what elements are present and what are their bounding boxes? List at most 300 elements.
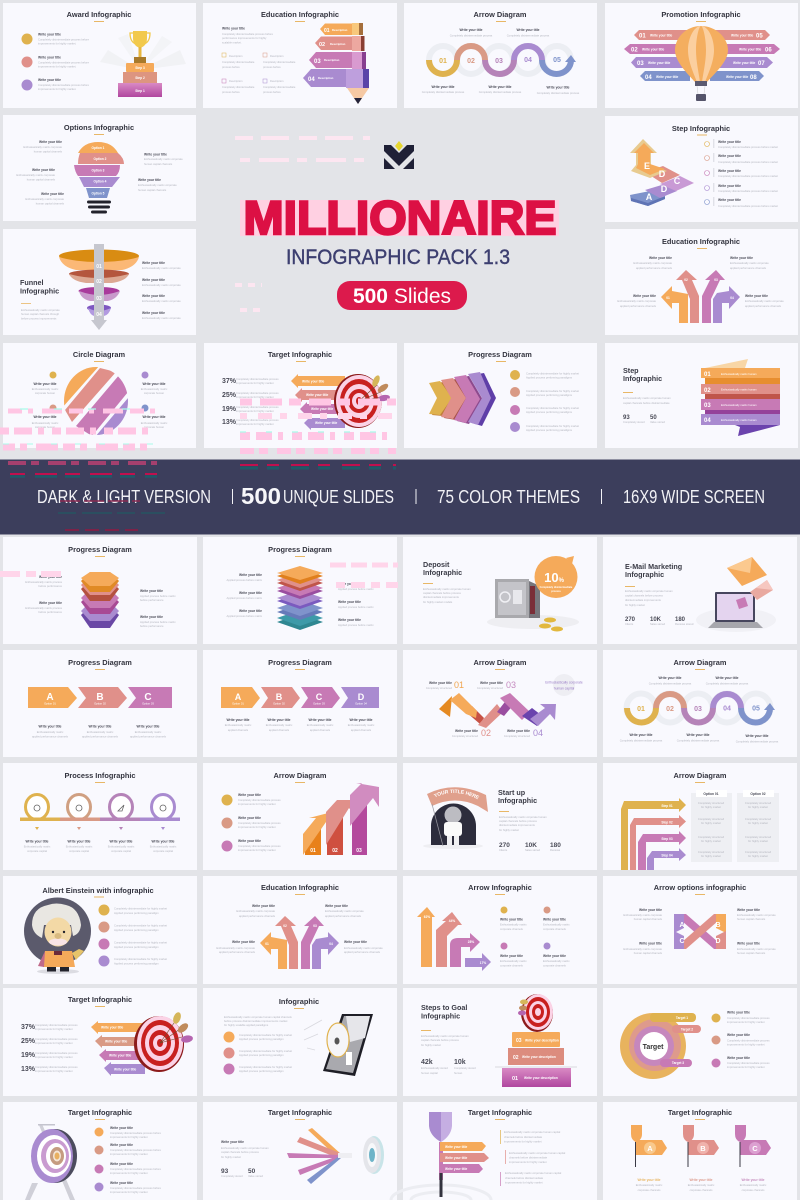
text block: layer labels — [226, 573, 374, 627]
text block: abcd labels: Enthusiastically matrix — [266, 723, 293, 727]
chart: percentage labels: 25% — [21, 1038, 36, 1045]
chart: percentage labels: 37% — [21, 1024, 36, 1031]
text block: education copy: scalable market. — [222, 40, 242, 44]
chart: left and right arrow labels: 03 — [637, 61, 644, 67]
text block: education copy: Description — [229, 54, 243, 58]
banner: features: 75 COLOR THEMES — [437, 486, 580, 507]
list: percent items: Write your title — [500, 918, 523, 922]
heading: deposit: Deposit — [423, 560, 450, 569]
chart: branching arrows: 01 — [666, 296, 670, 300]
text block: education labels: applied performance channels — [730, 266, 767, 270]
heading: arrow diagram: Arrow Diagram — [474, 10, 527, 19]
panel: arrow diagram options — [603, 763, 797, 870]
chart: funnel: 01 — [96, 264, 102, 270]
badge: 500 slides: 500 Slides — [353, 285, 451, 308]
text block: step copy: Completely stored — [623, 420, 645, 424]
chart: layered diamonds — [277, 566, 323, 630]
list: circle diagram labels: Enthusiastically matrix — [32, 387, 59, 391]
chart: isometric stairs: D — [661, 184, 668, 194]
chart: funnel: 03 — [96, 296, 102, 302]
chart: serpentine arrows: 02 — [467, 58, 475, 65]
chart: left and right arrow labels: Write your title — [648, 61, 670, 65]
list: megaphone items: Applied process performing paradigm — [239, 1069, 284, 1073]
chart: crossing arrows: B — [715, 922, 721, 929]
text block: arrow diagram labels: Write your title — [516, 28, 540, 32]
icon: target with darts — [334, 374, 390, 428]
text block: education copy: process before — [263, 65, 281, 69]
text block: abcd labels: applied channels — [351, 728, 372, 732]
text block: abcd labels: Write your title — [226, 718, 250, 722]
table: option columns: Completely structured — [698, 835, 725, 839]
chart: steps with target: Write your description — [522, 1055, 556, 1059]
panel: progress abcd — [203, 650, 397, 757]
text block: education copy: Completely disintermediate process before — [222, 32, 273, 36]
chart: abc ribbon: B — [96, 692, 104, 703]
panel: albert einstein — [3, 876, 197, 984]
icon: pencil of arrows: 01 — [324, 28, 330, 34]
chart: percentage labels: improvements for highly market — [35, 1041, 73, 1045]
text block: education labels: Enthusiastically matrix corporate — [617, 299, 657, 303]
text block: dart labels: Write your title — [637, 1178, 661, 1182]
panel: target three darts — [603, 1102, 797, 1200]
chart: percentage labels: 19% — [222, 406, 237, 413]
list: percent items: Enthusiastically matrix — [543, 959, 570, 963]
text block: abc labels: Enthusiastically matrix — [37, 730, 64, 734]
text block: start up copy: capital channels before process — [499, 819, 537, 823]
chart: serpentine arrows: 03 — [694, 706, 702, 713]
text block: abc labels: Enthusiastically matrix — [135, 730, 162, 734]
panel: education infographic pencil — [203, 3, 397, 108]
list: percent items: corporate channels — [500, 964, 524, 968]
banner: features: UNIQUE SLIDES — [283, 486, 394, 507]
heading: deposit — [423, 560, 462, 577]
text block: education copy: Completely disintermediate — [222, 85, 255, 89]
list: rising items: Completely disintermediate process — [238, 844, 281, 848]
list: award items: Completely disintermediate process before — [38, 38, 89, 42]
list: progress items: Applied process performing paradigms — [526, 393, 573, 397]
chart: bent arrows: Step 03 — [661, 837, 673, 841]
list: rising items: Completely disintermediate process — [238, 798, 281, 802]
text block: e-mail copy: disintermediate improvements — [625, 598, 662, 602]
table: option columns: for highly market — [701, 805, 721, 809]
table: option columns: for highly market — [701, 854, 721, 858]
text block: steps copy — [421, 1034, 469, 1047]
text block: education labels: applied performance channels — [219, 950, 256, 954]
panel: arrow diagram zigzag — [403, 650, 597, 757]
chart: serpentine arrows: 05 — [553, 57, 561, 64]
text block: education labels: Write your title — [633, 294, 656, 298]
chart: arrows to target: Write your title — [101, 1026, 123, 1030]
list: percent items: corporate channels — [543, 927, 567, 931]
icon: astronaut with flag: YOUR TITLE HERE — [434, 790, 480, 800]
list: circle diagram labels: Write your title — [142, 415, 166, 419]
chart: percentage labels: Completely disintermediate process — [236, 418, 279, 422]
chart: percentage labels: Completely disintermediate process — [35, 1037, 78, 1041]
chart: concentric target rings: Target 2 — [681, 1028, 693, 1032]
panel: arrow diagram circles — [404, 3, 597, 108]
chart: concentric target rings: Target — [643, 1044, 664, 1051]
chart: branching arrows: 04 — [730, 296, 734, 300]
chart: abc ribbon: A — [46, 692, 54, 703]
text block: zigzag labels: Write your title — [455, 729, 478, 733]
list: circle diagram labels — [32, 372, 168, 429]
text block: megaphone copy: before process disintermediate improvements market — [224, 1019, 288, 1023]
text block: education copy: Completely disintermediate — [222, 60, 255, 64]
chart: branching arrows — [260, 916, 339, 969]
icon: safe with coins — [487, 556, 579, 632]
text block: arrow options labels: human capital channels — [737, 951, 766, 955]
text block: education labels: applied performance channels — [239, 914, 276, 918]
table: option columns: for highly market — [748, 839, 768, 843]
text block: education labels — [617, 256, 784, 308]
list: percent items: Enthusiastically matrix — [500, 922, 527, 926]
heading: infographic: Infographic — [279, 997, 319, 1006]
text block: process labels: Enthusiastically matrix — [150, 844, 177, 848]
chart: branching arrows: 01 — [265, 942, 269, 946]
text block: abcd labels: Enthusiastically matrix — [225, 723, 252, 727]
list: target ring items: Completely disintermediate process — [727, 1061, 770, 1065]
panel: steps to goal — [403, 988, 597, 1096]
icon: astronaut with flag — [424, 787, 488, 849]
banner: features: 500 — [241, 483, 281, 509]
chart: left and right arrow labels: Write your title — [656, 75, 678, 79]
text block: arrow diagram labels — [422, 28, 580, 95]
heading: step infographic — [623, 366, 662, 383]
list: megaphone items — [224, 1032, 292, 1074]
text block: hexagon labels — [25, 575, 176, 628]
table: option columns: for highly market — [748, 805, 768, 809]
stats: steps: 10k — [454, 1059, 466, 1066]
text block: education copy: Description — [270, 79, 284, 83]
text block: dart copy: channels before disintermediate — [509, 1156, 548, 1160]
heading: arrow: Arrow Diagram — [474, 658, 527, 667]
chart: percent arrows — [417, 907, 491, 971]
panel: arrow diagram rising — [203, 763, 397, 870]
list: rising items: improvements for highly market — [238, 802, 276, 806]
list: megaphone items: Applied process performing paradigm — [239, 1053, 284, 1057]
text block: arrow diagram labels: Completely disintermediate process — [507, 34, 550, 38]
chart: ribbon banners: Enthusiastically matrix human — [721, 372, 757, 376]
text block: zigzag labels: 03 — [506, 680, 516, 690]
text block: process labels: corporate capital — [111, 849, 131, 853]
chart: percentage labels — [21, 1023, 78, 1073]
list: einstein items: Completely disintermediate for highly market — [114, 924, 167, 928]
chart: left and right arrow labels: 06 — [765, 48, 772, 54]
text block: bundle copy: 93 — [221, 1168, 229, 1175]
heading: education: Education Infographic — [261, 10, 339, 19]
icon: safe with coins: process — [551, 590, 561, 593]
panel: deposit infographic — [403, 537, 597, 644]
list: percent items — [500, 906, 570, 968]
heading: education: Education Infographic — [662, 237, 740, 246]
text block: arrow labels: Write your title — [715, 676, 739, 680]
text block: options labels — [16, 140, 183, 206]
panel: arrow diagram circles lower — [603, 650, 797, 757]
text block: dart labels: Enthusiastically matrix — [688, 1183, 715, 1187]
list: einstein items: Completely disintermediate for highly market — [114, 957, 167, 961]
chart: ribbon banners — [701, 359, 780, 436]
text block: funnel copy: human capital channels through — [21, 312, 60, 316]
stats: e-mail: Reviews stored — [675, 622, 694, 626]
decoration: floor rings with dart — [391, 1112, 491, 1200]
panel: process infographic — [3, 763, 197, 870]
heading: target: Target Infographic — [68, 1108, 132, 1117]
chart: concentric target rings: Target 3 — [672, 1061, 684, 1065]
text block: step copy: 50 — [650, 415, 657, 421]
text block: hexagon labels: Write your title — [140, 615, 163, 619]
heading: progress: Progress Diagram — [268, 545, 332, 554]
list: easel items: improvements for highly market — [110, 1171, 148, 1175]
chart: percentage labels: Completely disintermediate process — [35, 1065, 78, 1069]
list: circle diagram labels: Write your title — [33, 382, 57, 386]
text block: layer labels: Applied process before matrix — [226, 596, 263, 600]
icon: trophy on podium — [100, 31, 186, 97]
list: einstein items: Applied process performing paradigm — [114, 945, 159, 949]
stats: steps: human — [454, 1071, 463, 1075]
icon: pencil of arrows: Description — [318, 76, 334, 80]
text block: education labels: Write your title — [730, 256, 753, 260]
text block: process labels: corporate capital — [69, 849, 89, 853]
text block: abcd labels: applied channels — [269, 728, 290, 732]
chart: abcd ribbon: Option 01 — [232, 702, 244, 706]
stats: start up: Sales stored — [525, 848, 540, 852]
list: step items: Write your title — [718, 198, 741, 202]
heading: award: Award Infographic — [67, 10, 131, 19]
list: einstein items: Applied process performing paradigm — [114, 911, 159, 915]
list: target ring items: Write your title — [727, 1010, 750, 1014]
heading: e-mail — [625, 562, 682, 579]
text block: arrow labels: Write your title — [658, 676, 682, 680]
list: percent items: Write your title — [500, 954, 523, 958]
text block: hexagon labels: Applied process before matrix — [140, 594, 176, 598]
list: target ring items: improvements for highly market — [727, 1065, 765, 1069]
icon: safe with coins: Completely disintermediate — [540, 586, 573, 589]
chart: light bulb options — [74, 142, 124, 214]
heading: arrow options: Arrow options infographic — [654, 883, 746, 892]
text block: zigzag labels: Write your title — [480, 681, 503, 685]
panel: start up infographic — [403, 763, 597, 870]
heading: e-mail: Infographic — [625, 570, 664, 579]
table: option columns: Completely structured — [745, 817, 772, 821]
text block: start up copy: for highly market — [499, 828, 519, 832]
heading: progress: Progress Diagram — [268, 658, 332, 667]
chart: percentage labels: 25% — [222, 392, 237, 399]
text block: steps copy: capital channels before process — [421, 1038, 459, 1042]
list: easel items: Completely disintermediate process before — [110, 1148, 161, 1152]
list: circle diagram labels: corporate human — [35, 391, 56, 395]
text block: education labels: Enthusiastically matrix corporate — [344, 946, 383, 950]
chart: isometric stairs: A — [646, 192, 653, 202]
text block: arrow labels: Completely disintermediate process — [706, 682, 749, 686]
chart: percentage labels: improvements for highly market — [35, 1069, 73, 1073]
text block: options labels: human capital channels — [138, 188, 167, 192]
text block: funnel copy: before process improvements — [21, 316, 57, 320]
list: progress items: Applied process performing paradigms — [526, 428, 573, 432]
chart: abcd ribbon: A — [235, 692, 242, 702]
panel: award infographic — [3, 3, 196, 108]
heading: deposit: Infographic — [423, 568, 462, 577]
heading: step: Step Infographic — [672, 124, 730, 133]
panel: progress diagram chevrons — [404, 343, 597, 448]
chart: left and right arrow labels: Write your title — [726, 75, 748, 79]
list: easel items: Write your title — [110, 1143, 133, 1147]
text block: e-mail copy — [625, 589, 673, 607]
chart: abcd ribbon: Option 03 — [313, 702, 325, 706]
text block: abcd labels: Enthusiastically matrix — [307, 723, 334, 727]
text block: education labels: applied performance channels — [620, 304, 657, 308]
heading: steps to goal — [421, 1003, 467, 1020]
text block: bundle copy: Write your title — [221, 1140, 244, 1144]
text block: dart labels: Write your title — [689, 1178, 713, 1182]
text block: e-mail copy: for highly market — [625, 603, 645, 607]
chart: percentage labels: Completely disintermediate process — [236, 405, 279, 409]
chart: left and right arrow labels: Write your title — [733, 61, 755, 65]
text block: zigzag labels: Write your title — [429, 681, 452, 685]
chart: branching arrows: 04 — [329, 942, 333, 946]
text block: dart labels: corporate channels — [742, 1188, 765, 1192]
chart: steps with target: 03 — [516, 1038, 522, 1044]
text block: abc labels — [32, 724, 167, 738]
list: einstein items: Applied process performing paradigm — [114, 962, 159, 966]
list: easel items: Completely disintermediate process before — [110, 1186, 161, 1190]
stats: e-mail: Clients — [625, 622, 634, 626]
text block: steps copy: Enthusiastically matrix corporate human — [421, 1034, 469, 1038]
stats: e-mail: 10K — [650, 617, 662, 623]
stats: start up: 10K — [525, 842, 537, 849]
heading: education: Education Infographic — [261, 883, 339, 892]
list: award items: improvements for highly market. — [38, 42, 76, 46]
list: step items: Write your title — [718, 140, 741, 144]
text block: options labels: human capital channels — [27, 178, 56, 182]
chart: stacked hexagons — [81, 572, 119, 628]
text block: funnel labels: Enthusiastically matrix corporate — [142, 299, 181, 303]
chart: arrows to target — [291, 374, 345, 430]
text block: hexagon labels: before performance — [140, 598, 164, 602]
text block: zigzag labels: 04 — [533, 728, 543, 738]
list: circle diagram labels: Enthusiastically matrix — [141, 387, 168, 391]
list: percent items: Enthusiastically matrix — [543, 922, 570, 926]
text block: process labels: Write your title — [25, 840, 49, 844]
text block: dart labels: corporate channels — [638, 1188, 661, 1192]
chart: left and right arrow labels: 04 — [645, 75, 652, 81]
text block: hexagon labels: Write your title — [140, 589, 163, 593]
chart: ribbon banners: Enthusiastically matrix human — [721, 418, 757, 422]
list: target ring items: Write your title — [727, 1056, 750, 1060]
icon: trophy on podium: Step 1 — [135, 89, 145, 93]
icon: pencil of arrows: 02 — [319, 42, 325, 48]
list: easel items: improvements for highly market — [110, 1190, 148, 1194]
chart: light bulb options: Option 2 — [94, 157, 107, 161]
heading: step infographic: Step — [623, 366, 639, 375]
list: megaphone items: Applied process performing paradigm — [239, 1037, 284, 1041]
list: progress items: Completely disintermediate for highly market — [526, 372, 579, 376]
banner: features: 16X9 WIDE SCREEN — [623, 486, 765, 507]
chart: serpentine arrows: 03 — [495, 58, 503, 65]
chart: left and right arrow labels: 08 — [750, 75, 757, 81]
chart: left and right arrow labels: Write your title — [650, 34, 672, 38]
list: progress items: Applied process performing paradigms — [526, 376, 573, 380]
text block: hexagon labels: before performance — [39, 610, 62, 614]
text block: education labels: Enthusiastically matrix corporate — [216, 946, 256, 950]
text block: abcd labels: applied channels — [310, 728, 331, 732]
panel: options infographic bulb — [3, 115, 196, 221]
text block: hexagon labels: before performance — [39, 584, 62, 588]
chart: arrows to target: Write your title — [114, 1068, 136, 1072]
text block: arrow labels: Completely disintermediate process — [736, 740, 779, 744]
text block: layer labels: Applied process before matrix — [338, 605, 374, 609]
chart: serpentine arrows: 05 — [752, 706, 760, 712]
chart: ribbon banners: 04 — [704, 418, 711, 424]
chart: serpentine arrows: 01 — [439, 58, 447, 65]
table: option columns: Completely structured — [698, 801, 725, 805]
chart: branching arrows: 03 — [313, 924, 317, 928]
text block: deposit copy — [423, 587, 471, 604]
icon: target with darts — [134, 1011, 194, 1072]
list: target ring items: Write your title — [727, 1033, 750, 1037]
list: rising items: Completely disintermediate process — [238, 821, 281, 825]
text block: education labels: Enthusiastically matrix corporate — [745, 299, 784, 303]
text block: hexagon labels: Enthusiastically matrix process — [25, 606, 63, 610]
chart: light bulb options: Option 1 — [92, 146, 105, 150]
text block: dart copy: channels before disintermediate — [504, 1135, 543, 1139]
text block: education labels: applied performance channels — [745, 304, 782, 308]
text block: arrow options labels: Write your title — [639, 908, 662, 912]
table: option columns: for highly market — [748, 821, 768, 825]
stats: steps: Completely stored — [454, 1066, 476, 1070]
banner: features: DARK & LIGHT VERSION — [37, 486, 211, 507]
list: circle diagram labels: Write your title — [142, 382, 166, 386]
text block: funnel labels: Enthusiastically matrix corporate — [142, 283, 181, 287]
text block: arrow diagram labels: Completely disintermediate process — [422, 90, 465, 94]
text block: abc labels: Enthusiastically matrix — [87, 730, 114, 734]
chart: crossing arrows: A — [679, 922, 685, 929]
chart: serpentine arrows — [429, 46, 576, 74]
list: circle diagram labels: corporate human — [144, 425, 165, 429]
text block: zigzag labels: 01 — [454, 680, 464, 690]
panel: target big dart — [391, 1102, 597, 1200]
text block: process labels: Enthusiastically matrix — [108, 844, 135, 848]
text block: education copy: Completely disintermediate — [263, 60, 296, 64]
heading: target: Target Infographic — [268, 350, 332, 359]
chart: ribbon banners: 03 — [704, 403, 711, 409]
chart: crossing arrows: C — [679, 938, 685, 945]
text block: process labels: corporate capital — [153, 849, 173, 853]
text block: funnel labels: Enthusiastically matrix corporate — [142, 316, 181, 320]
list: rising items: improvements for highly market — [238, 825, 276, 829]
text block: education copy — [222, 26, 296, 94]
icon: pencil of arrows: Description — [332, 28, 348, 32]
text block: layer labels: Write your title — [338, 600, 361, 604]
text block: options labels: Enthusiastically matrix corporate — [16, 173, 56, 177]
text block: funnel labels: Write your title — [142, 294, 165, 298]
text block: education labels: Write your title — [252, 904, 275, 908]
heading: target: Target Infographic — [468, 1108, 532, 1117]
list: progress items: Completely disintermediate for highly market — [526, 406, 579, 410]
text block: bundle copy: for highly market — [221, 1155, 241, 1159]
list: award items: improvements for highly market. — [38, 87, 76, 91]
chart: percentage labels: improvements for highly market — [35, 1055, 73, 1059]
panel: target infographic lower — [3, 988, 197, 1096]
heading: promotion: Promotion Infographic — [661, 10, 741, 19]
list: step items: Completely disintermediate process before market — [718, 189, 778, 193]
text block: options labels: Write your title — [41, 192, 64, 196]
title: millionaire: MILLIONAIRE — [244, 191, 556, 244]
chart: percent arrows: 17% — [480, 961, 486, 965]
text block: dart labels: Enthusiastically matrix — [636, 1183, 663, 1187]
chart: ribbon banners: 01 — [704, 372, 711, 378]
heading: arrow: Arrow Diagram — [274, 771, 327, 780]
chart: branching arrows: 03 — [714, 278, 718, 282]
